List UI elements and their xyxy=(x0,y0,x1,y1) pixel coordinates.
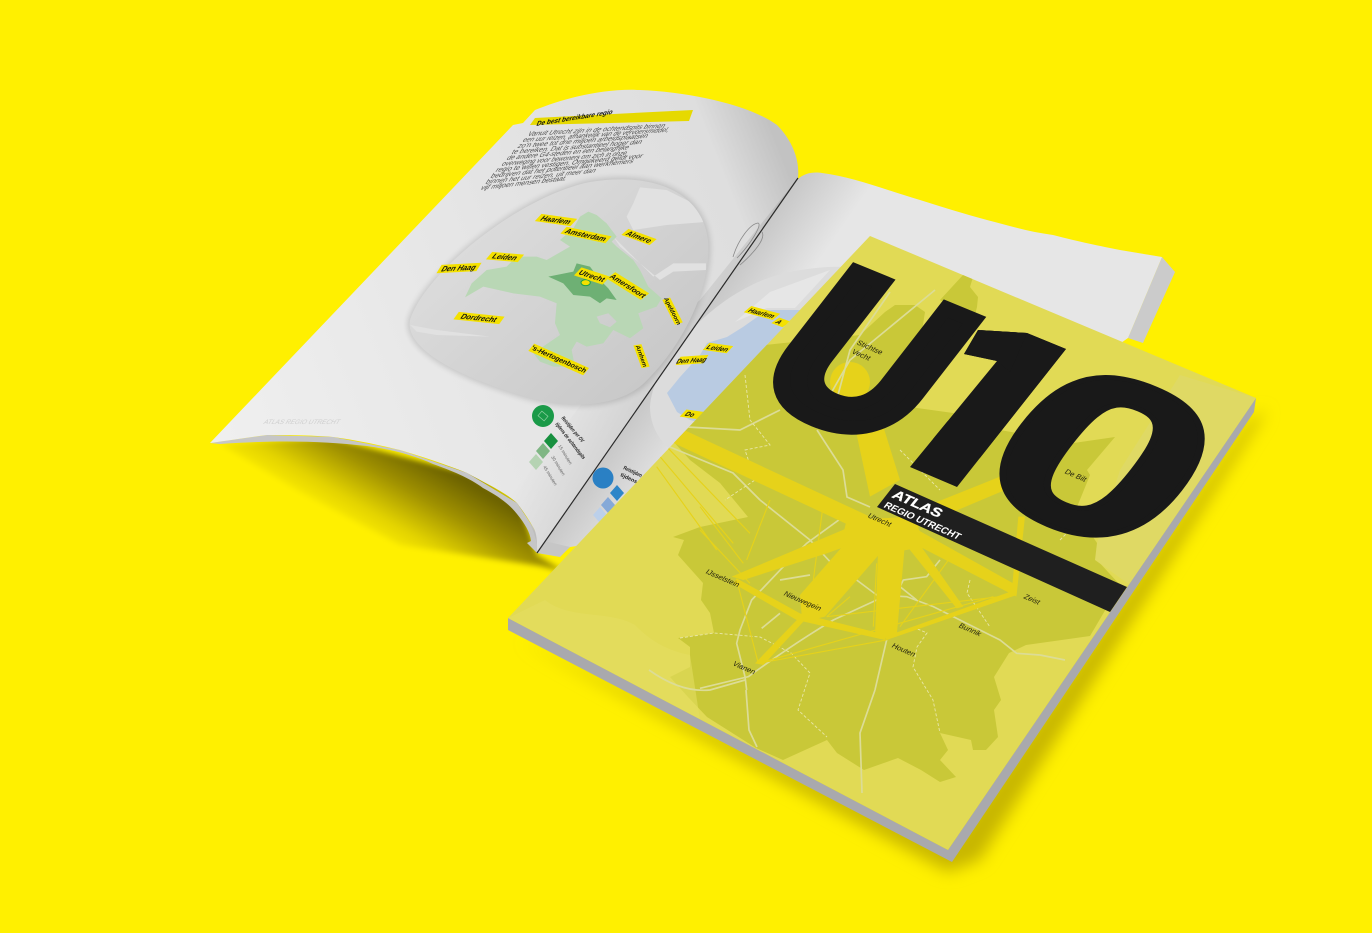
black title band xyxy=(877,484,1127,612)
cover: outer roads xyxy=(649,290,1065,793)
legend title: Reistijden per OV xyxy=(559,416,585,444)
paragraph: te bereiken. Dat is substantieel hoger dan xyxy=(510,137,645,156)
legend subtitle: tijdens xyxy=(619,472,638,485)
spine line xyxy=(537,178,798,553)
left page city labels: Almere xyxy=(623,230,655,245)
cover base xyxy=(508,236,1256,850)
city names: Bunnik xyxy=(957,622,984,638)
right page map bubble xyxy=(650,267,905,480)
cover: roads xyxy=(700,500,1040,690)
paragraph xyxy=(479,121,672,192)
left page city labels: Amersfoort xyxy=(607,273,649,300)
right page blue region xyxy=(667,310,800,430)
left page city labels: Den Haag xyxy=(439,263,478,273)
map: reachable area green xyxy=(465,212,662,367)
letter U: U xyxy=(718,227,1017,486)
city names: Utrecht xyxy=(866,512,895,529)
left page city labels: Amsterdam xyxy=(563,227,609,243)
map: pale land and rivers xyxy=(410,187,710,337)
left page city labels: Haarlem xyxy=(538,215,574,226)
panel: left page xyxy=(210,90,798,553)
right page labels xyxy=(674,306,791,419)
left page city labels: 's-Hertogenbosch xyxy=(529,344,588,375)
left page legend: 15 minuten xyxy=(557,444,573,466)
page footer: ATLAS REGIO UTRECHT xyxy=(262,419,342,426)
map: inner area xyxy=(548,263,617,303)
panel: right page xyxy=(537,173,1162,556)
cover: sliver above the 1 xyxy=(940,275,978,315)
flag of the 1 xyxy=(964,330,1027,372)
subtitle: REGIO UTRECHT: REGIO UTRECHT xyxy=(881,501,963,542)
panel: left page stack xyxy=(210,435,570,557)
legend subtitle: tijdens de ochtendspits xyxy=(553,422,586,460)
city names: Vecht xyxy=(850,348,874,363)
panel: right page stack xyxy=(1128,257,1175,343)
letter 0: 0 xyxy=(928,311,1276,603)
city names: Nieuwegein xyxy=(782,590,824,612)
left page city labels xyxy=(436,214,683,375)
left page fold shading xyxy=(510,178,798,553)
cover: bright spot xyxy=(830,362,870,397)
city names: Stichtse xyxy=(855,339,885,356)
paragraph: Vanuit Utrecht zijn in de ochtendspits binnen xyxy=(526,121,668,138)
page heading band xyxy=(530,108,693,128)
cover: traffic flow bands xyxy=(660,425,1037,665)
right page labels: Do xyxy=(682,410,698,419)
city names: De Bilt xyxy=(1063,468,1090,484)
left page city labels: Apeldoorn xyxy=(662,297,681,326)
left page map bubble shadow xyxy=(408,177,710,406)
left page legend: 30 minuten xyxy=(550,455,566,477)
shadow under left page xyxy=(220,438,565,572)
city names: Vianen xyxy=(731,660,758,676)
cover: pale right corner xyxy=(1095,375,1256,585)
map: Utrecht marker xyxy=(581,280,590,286)
open magazine xyxy=(210,90,1175,557)
legend title: Reistijden xyxy=(622,465,643,479)
city names xyxy=(704,339,1090,676)
right page pale land xyxy=(735,270,830,322)
title: ATLAS: ATLAS xyxy=(889,488,946,520)
right page labels: A xyxy=(773,318,786,326)
paragraph: zo'n twee tot drie miljoen arbeidsplaatsen xyxy=(516,131,651,150)
right page labels: Haarlem xyxy=(746,307,778,320)
cover thickness xyxy=(508,398,1256,862)
icon: blue circle xyxy=(592,468,614,488)
icon: green circle xyxy=(532,405,554,427)
shadow under cover xyxy=(520,410,1266,872)
left page city labels: Leiden xyxy=(490,252,520,262)
paragraph: regio te willen vestigen. Omgekeerd geldt voor xyxy=(494,151,646,174)
left page map bubble xyxy=(410,179,708,404)
city names: Zeist xyxy=(1022,593,1043,607)
cover: thin flow lines xyxy=(657,447,1000,663)
cover: pale bottom-left xyxy=(508,618,698,716)
left page legend xyxy=(529,405,586,487)
heading: De best bereikbare regio xyxy=(535,108,615,128)
cover: municipal area xyxy=(670,305,1120,782)
paragraph: binnen het uur reizen, uit meer dan xyxy=(484,166,599,186)
page curl outlines xyxy=(733,223,763,265)
paragraph: bedrijven dat het potentieel aan werknemers xyxy=(489,156,637,180)
left page city labels: Arnhem xyxy=(634,345,647,367)
city names: Houten xyxy=(890,642,918,658)
left page legend: 45 minuten xyxy=(542,465,558,487)
paragraph: vijf miljoen mensen bestaat. xyxy=(479,174,570,192)
panel: cover xyxy=(508,227,1276,850)
letter 1: 1 xyxy=(859,262,1155,517)
paragraph: een uur reizen, afhankelijk van de vervoersmiddel, xyxy=(521,125,672,144)
title: U10 xyxy=(773,262,1205,538)
left page city labels: Dordrecht xyxy=(458,312,500,324)
city names: IJsselstein xyxy=(704,568,742,589)
cover: municipal boundaries xyxy=(680,375,1085,737)
right page labels: Leiden xyxy=(704,343,732,353)
right page legend xyxy=(592,465,643,523)
paragraph: de andere G4-steden en een belangrijke xyxy=(505,143,632,162)
left page city labels: Utrecht xyxy=(576,269,608,284)
right page labels: Den Haag xyxy=(674,355,709,366)
paragraph: overweging voor bewoners om zich in onze xyxy=(500,149,630,168)
